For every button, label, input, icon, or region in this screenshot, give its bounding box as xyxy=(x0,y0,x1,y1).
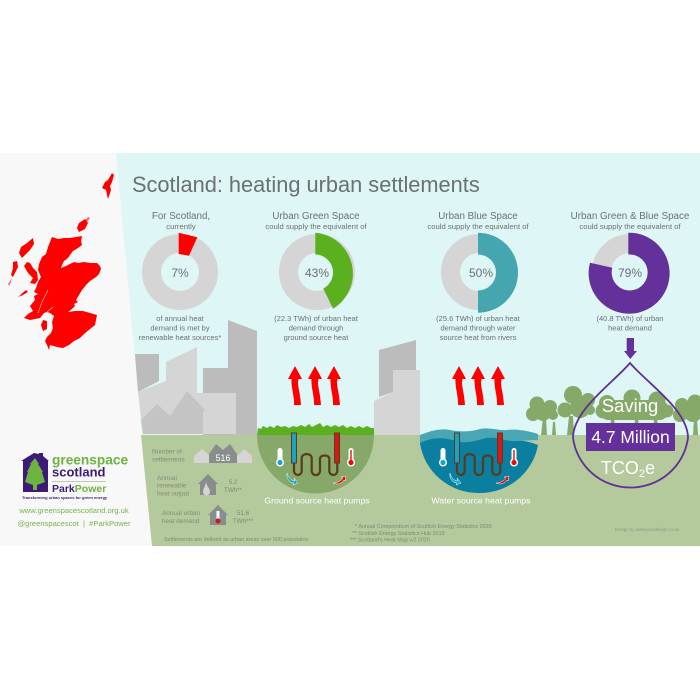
footnotes: ** Scottish Energy Statistics Hub 2019 xyxy=(352,531,445,537)
footnotes xyxy=(350,524,492,544)
doughnut: 79% green and blue space: 79% xyxy=(618,266,642,280)
logo: greenspace scotland ParkPower xyxy=(21,452,128,500)
doughnut: 50% blue space: demand through water xyxy=(440,324,516,332)
doughnut: 7% Scotland: renewable heat sources* xyxy=(139,333,221,342)
map of Scotland xyxy=(8,173,114,350)
buildings: centre skyline xyxy=(374,340,420,435)
droplet: saving callout: TCO xyxy=(601,458,639,478)
thermometer: cold xyxy=(276,448,284,466)
stat: annual renewable heat output: Annual xyxy=(157,475,177,482)
stat: annual renewable heat output: heat output xyxy=(157,490,189,498)
flow arrow: cold xyxy=(287,473,298,485)
trees xyxy=(526,386,700,435)
stat: annual urban heat demand: Annual urban xyxy=(162,510,200,517)
stat: annual renewable heat output: 5.2 xyxy=(229,479,238,486)
droplet: saving callout xyxy=(573,363,688,488)
flow arrow: hot xyxy=(333,476,346,484)
doughnut: 7% Scotland: currently xyxy=(166,222,196,231)
stat: annual urban heat demand: heat demand xyxy=(162,518,200,525)
droplet: saving callout: 2 xyxy=(639,468,645,480)
cold pipe xyxy=(454,433,460,463)
doughnut: 43% green space: 43% xyxy=(305,266,329,280)
doughnut: 43% green space xyxy=(265,211,368,342)
hot pipe xyxy=(334,433,340,463)
pipe loop xyxy=(294,454,337,475)
footnotes: *** Scotland's Heat Map v.2 2020 xyxy=(350,538,430,544)
panel: left white-grey background xyxy=(0,153,160,546)
doughnut: 43% green space: could supply the equivalent of xyxy=(265,222,368,231)
droplet: saving callout: 4.7 Million xyxy=(591,427,670,447)
doughnut: 50% blue space: source heat from rivers xyxy=(440,333,517,342)
stat: annual urban heat demand: 51.6 xyxy=(237,510,250,517)
stat: annual urban heat demand xyxy=(162,505,254,525)
doughnut: 43% green space: demand through xyxy=(289,324,343,332)
stat: annual renewable heat output: TWh** xyxy=(224,487,243,494)
doughnut: 50% blue space: could supply the equivalent of xyxy=(427,222,530,231)
doughnut: 7% Scotland: 7% xyxy=(171,266,189,280)
label: ground source heat pumps: Ground source heat pumps xyxy=(264,496,370,506)
icon: house with tree xyxy=(21,453,49,492)
heat arrows: water xyxy=(452,366,505,405)
water surface xyxy=(420,428,538,445)
thermometer: cold xyxy=(439,448,447,466)
grass xyxy=(257,423,374,435)
thermometer: hot xyxy=(510,448,518,466)
title: Scotland: heating urban settlements xyxy=(132,172,480,197)
panel: ground xyxy=(141,435,700,546)
heat arrows: ground xyxy=(288,366,341,405)
logo: greenspace scotland ParkPower: greenspace xyxy=(52,452,128,468)
credit: Design by www.jonodesign.co.uk xyxy=(615,527,680,532)
doughnut: 79% green and blue space: (40.8 TWh) of urban xyxy=(597,314,663,323)
doughnut: 79% green and blue space: heat demand xyxy=(608,324,652,332)
website: www.greenspacescotland.org.uk xyxy=(18,506,129,515)
doughnut: 7% Scotland: demand is met by xyxy=(150,324,210,332)
droplet: saving callout: Saving xyxy=(602,395,658,416)
water source heat pump xyxy=(420,366,538,506)
stat: annual urban heat demand: TWh*** xyxy=(233,518,254,525)
stat: annual renewable heat output: renewable xyxy=(157,482,187,490)
cold pipe xyxy=(292,433,296,463)
pipe loop xyxy=(457,454,500,475)
flow arrow: cold xyxy=(450,473,461,485)
flow arrow: hot xyxy=(496,476,509,484)
footnotes: * Annual Compendium of Scottish Energy Statistics 2020 xyxy=(355,524,492,530)
note: settlement definition: Settlements are defined as urban areas over 500 population xyxy=(164,537,308,543)
doughnut: 7% Scotland: For Scotland, xyxy=(152,211,210,222)
stat: number of settlements: 516 xyxy=(216,453,230,463)
panel: pale blue sky xyxy=(116,153,700,546)
doughnut: 50% blue space: Urban Blue Space xyxy=(438,211,518,222)
doughnut: 43% green space: Urban Green Space xyxy=(272,211,360,222)
stat: number of settlements: Number of xyxy=(152,448,182,456)
doughnut: 7% Scotland xyxy=(139,211,221,342)
social handles: @greenspacescot | #ParkPower xyxy=(17,519,131,528)
doughnut: 79% green and blue space: Urban Green & Blue Space xyxy=(571,211,690,222)
doughnut: 79% green and blue space: could supply the equivalent of xyxy=(579,222,682,231)
droplet: saving callout: e xyxy=(645,458,655,478)
arrow: down to saving xyxy=(624,338,637,359)
hot pipe xyxy=(498,433,502,463)
ground source heat pump xyxy=(257,366,374,506)
doughnut: 50% blue space: 50% xyxy=(469,266,493,280)
buildings: left skyline xyxy=(135,320,257,435)
doughnut: 79% green and blue space xyxy=(571,211,690,332)
logo: greenspace scotland ParkPower: ParkPower xyxy=(52,483,106,495)
logo: greenspace scotland ParkPower: scotland xyxy=(52,464,106,480)
water cross-section xyxy=(420,438,538,493)
doughnut: 7% Scotland: of annual heat xyxy=(156,314,205,323)
stat: annual renewable heat output xyxy=(157,474,243,498)
doughnut: 43% green space: ground source heat xyxy=(284,333,349,342)
stat: number of settlements xyxy=(152,444,252,464)
doughnut: 50% blue space xyxy=(427,211,530,342)
doughnut: 50% blue space: (25.6 TWh) of urban heat xyxy=(436,314,521,323)
stat: number of settlements: settlements xyxy=(152,456,185,464)
thermometer: hot xyxy=(347,448,355,466)
label: water source heat pumps: Water source heat pumps xyxy=(431,496,531,506)
doughnut: 43% green space: (22.3 TWh) of urban heat xyxy=(274,314,359,323)
logo: greenspace scotland ParkPower: Transforming urban spaces for green energy xyxy=(22,495,108,500)
ground cross-section xyxy=(257,435,374,494)
